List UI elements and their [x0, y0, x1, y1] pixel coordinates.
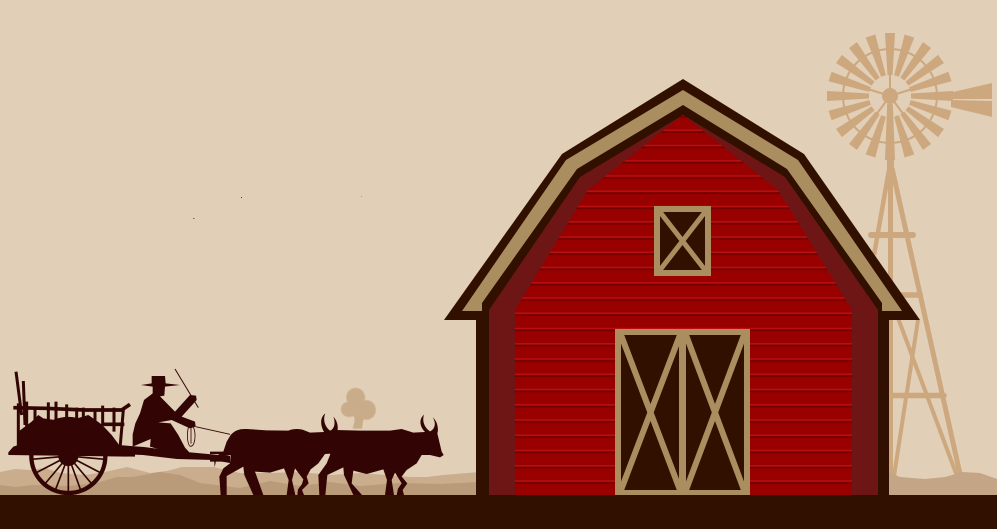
background tree: [341, 388, 375, 429]
cart pole: [118, 445, 230, 463]
windmill tail vane: [951, 83, 992, 117]
oxen: [210, 413, 444, 495]
siding boards: [515, 115, 852, 495]
windmill tower: [871, 160, 960, 495]
barn inner wall shade: [489, 115, 878, 495]
barn roof outline: [444, 79, 920, 495]
ground: [0, 495, 997, 529]
cart wheel: [31, 419, 105, 493]
loft window: [654, 206, 711, 276]
distant hills front layer: [0, 472, 480, 495]
driver: [133, 369, 230, 455]
ox cart: [8, 369, 230, 493]
barn door: [615, 329, 750, 495]
right hills: [885, 470, 997, 495]
front ox: [318, 415, 444, 495]
rear ox: [214, 413, 338, 495]
barn: [444, 79, 920, 495]
windmill: [827, 33, 992, 495]
distant hills back layer: [0, 467, 480, 495]
specks: [193, 196, 362, 219]
cart load and rails: [8, 372, 135, 457]
windmill wheel: [827, 33, 953, 160]
roof trim: [462, 90, 902, 311]
yoke beam: [210, 452, 232, 462]
barn red siding: [515, 115, 852, 495]
